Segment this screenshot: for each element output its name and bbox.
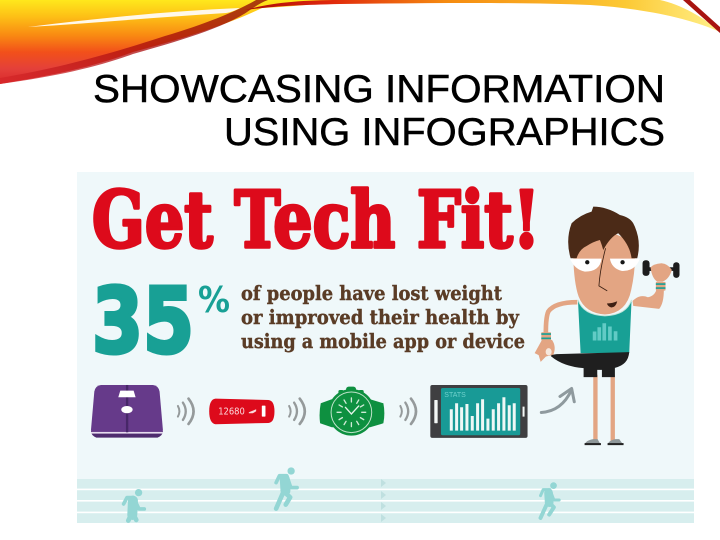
head [573,232,635,315]
icon: wireless signal [178,399,194,424]
mouth [607,301,617,308]
runner: right [541,482,559,518]
thumb [546,348,552,356]
icon: watch [320,387,384,436]
raised arm [633,289,664,309]
icon: fitness tracker: 12680 [218,407,245,418]
panel: infographic [77,172,694,523]
device row [91,385,528,438]
running track [77,479,694,523]
statistic description: using a mobile app or device [241,329,525,353]
wristband [541,332,551,341]
big statistic: % [198,280,230,321]
icon: wireless signal [400,399,416,424]
statistic description: or improved their health by [241,305,520,329]
title: USING INFOGRAPHICS [224,111,665,154]
eyes [570,259,640,272]
icon: fitness tracker [209,399,274,424]
hand [651,263,672,282]
runner: left [124,489,144,521]
runner: centre [276,467,297,509]
headline: Get Tech Fit! [92,175,540,266]
title: SHOWCASING INFORMATION [93,68,665,111]
big statistic: 35 [92,269,194,374]
icon: phone with stats: STATS [444,392,466,399]
nose [599,248,607,291]
hand [535,340,555,362]
hair [568,207,639,258]
arrow [541,388,574,412]
character: fitness man [535,207,680,445]
right arm [546,302,577,340]
statistic description: of people have lost weight [241,281,503,305]
tank top [578,300,632,353]
icon: dumbbell [643,260,680,278]
icon: smart scale [91,385,163,438]
shorts [551,352,629,377]
legs and shoes [585,375,624,445]
wristband [656,282,666,291]
icon: phone with stats [430,385,528,438]
decorative swoosh banner [0,0,720,84]
icon: wireless signal [289,399,305,424]
